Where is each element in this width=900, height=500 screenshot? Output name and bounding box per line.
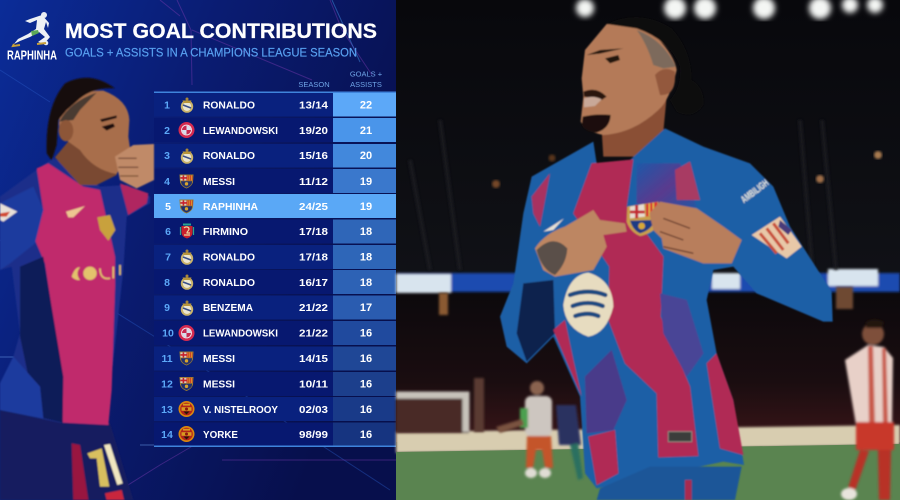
row 10: 16 [360, 328, 372, 340]
row 9: 9 [164, 302, 170, 314]
ear and eye [59, 120, 73, 141]
background player, right [841, 320, 894, 500]
row 2: 21 [360, 125, 372, 137]
row 8: RONALDO [203, 277, 255, 289]
eyes and brow [587, 48, 623, 63]
photo: stadium background [396, 0, 900, 500]
row 5: Raphinha highlight: 19 [360, 201, 372, 213]
row 11: 11 [161, 353, 173, 365]
row 11 [154, 346, 396, 370]
row 1 [154, 93, 396, 116]
row 4: 11/12 [299, 176, 328, 188]
jersey side stripes [553, 320, 582, 397]
row 6: FIRMINO [203, 226, 248, 238]
row 14 [154, 422, 396, 446]
row 12: 16 [360, 378, 372, 390]
row 6 [154, 220, 396, 244]
row 3 [154, 144, 396, 168]
row 8: 16/17 [299, 277, 328, 289]
row 4: 4 [164, 176, 170, 188]
row 7: 7 [165, 252, 171, 264]
row 13: 13 [161, 404, 173, 416]
jersey central red stripe [573, 159, 698, 457]
column header: goals + assists: GOALS + [350, 70, 383, 78]
row 8 [154, 270, 396, 294]
column header: season: SEASON [298, 80, 330, 89]
row 4 [154, 169, 396, 193]
sleeve text: AMBILIGH [739, 178, 771, 206]
row 2: LEWANDOWSKI [203, 125, 278, 137]
row 6: 6 [165, 226, 171, 238]
row 5: Raphinha highlight [154, 194, 396, 218]
hair and bun [607, 17, 704, 115]
crest [627, 202, 659, 236]
row 4: MESSI [203, 176, 235, 188]
row 8: 18 [360, 277, 372, 289]
row 13 [154, 397, 396, 421]
background player, left [496, 381, 583, 480]
neck [55, 133, 117, 185]
row 6: 18 [360, 226, 372, 238]
panel: left background [0, 0, 397, 500]
row 2 [154, 118, 396, 142]
photo: Raphinha pointing at crest, right [500, 17, 833, 500]
row 3: RONALDO [203, 150, 255, 162]
hand [115, 144, 154, 188]
row 13: 02/03 [299, 404, 328, 416]
icon: Raphinha logo: RAPHINHA [7, 48, 57, 62]
row 7 [154, 245, 396, 269]
row 5: Raphinha highlight: 5 [165, 201, 171, 213]
row 2: 19/20 [299, 125, 328, 137]
row 12: 10/11 [299, 378, 328, 390]
row 1: 22 [360, 100, 372, 112]
shorts [597, 467, 742, 500]
band glow lamps [439, 287, 853, 315]
title: MOST GOAL CONTRIBUTIONS [65, 19, 377, 43]
row 12: 12 [161, 378, 173, 390]
icon: Raphinha logo [7, 12, 57, 62]
shorts [0, 410, 133, 500]
sleeve patch [0, 203, 17, 222]
row 4: 19 [360, 176, 372, 188]
row 7: RONALDO [203, 252, 255, 264]
row 2: 2 [164, 125, 170, 137]
face [581, 23, 677, 135]
row 13: V. NISTELROOY [203, 404, 278, 416]
shirt logos [66, 206, 85, 217]
row 14: 98/99 [299, 429, 328, 441]
row 3: 3 [164, 150, 170, 162]
table: goal contributions ranking [154, 92, 396, 447]
ad boards [396, 425, 900, 453]
row 14: 16 [360, 429, 372, 441]
right hand [649, 202, 742, 263]
row 11: MESSI [203, 353, 235, 365]
stadium band [396, 269, 900, 293]
shorts number 11 [87, 448, 109, 487]
row 3: 20 [360, 150, 372, 162]
column header: goals + assists: ASSISTS [350, 80, 382, 89]
jersey purple fades [637, 163, 697, 213]
hair [47, 78, 115, 161]
row 11: 16 [360, 353, 372, 365]
jersey body [500, 128, 833, 488]
row 6: 17/18 [299, 226, 328, 238]
row 10 [154, 321, 396, 345]
floodlights [576, 0, 883, 19]
subtitle: GOALS + ASSISTS IN A CHAMPIONS LEAGUE SEASON [65, 46, 357, 60]
row 5: Raphinha highlight: 24/25 [299, 201, 328, 213]
row 12 [154, 372, 396, 396]
pitch [396, 444, 900, 500]
row 5: Raphinha highlight: RAPHINHA [203, 201, 258, 213]
row 8: 8 [164, 277, 170, 289]
beard and mouth [582, 114, 611, 133]
row 7: 17/18 [299, 252, 328, 264]
row 12: MESSI [203, 378, 235, 390]
row 10: 10 [162, 328, 174, 340]
goal [396, 378, 484, 433]
left hand [535, 210, 627, 277]
row 14: YORKE [203, 429, 238, 441]
sleeve inner shadow [517, 280, 555, 362]
face [59, 91, 130, 174]
crimson panel [35, 163, 115, 425]
row 1: 1 [164, 100, 170, 112]
row 10: 21/22 [299, 328, 328, 340]
row 9: BENZEMA [203, 302, 253, 314]
photo: Raphinha kissing hand, left cut-out [0, 78, 154, 500]
spotify badge [563, 273, 613, 337]
row 13: 16 [360, 404, 372, 416]
shirt base [0, 158, 150, 425]
row 7: 18 [360, 252, 372, 264]
neck [602, 97, 667, 157]
row 14: 14 [161, 429, 173, 441]
row 1: 13/14 [299, 100, 328, 112]
row 10: LEWANDOWSKI [203, 328, 278, 340]
row 3: 15/16 [299, 150, 328, 162]
row 9: 17 [360, 302, 372, 314]
row 1: RONALDO [203, 100, 255, 112]
jersey label [668, 432, 692, 442]
armband [752, 217, 802, 258]
row 11: 14/15 [299, 353, 328, 365]
row 9: 21/22 [299, 302, 328, 314]
row 9 [154, 296, 396, 320]
